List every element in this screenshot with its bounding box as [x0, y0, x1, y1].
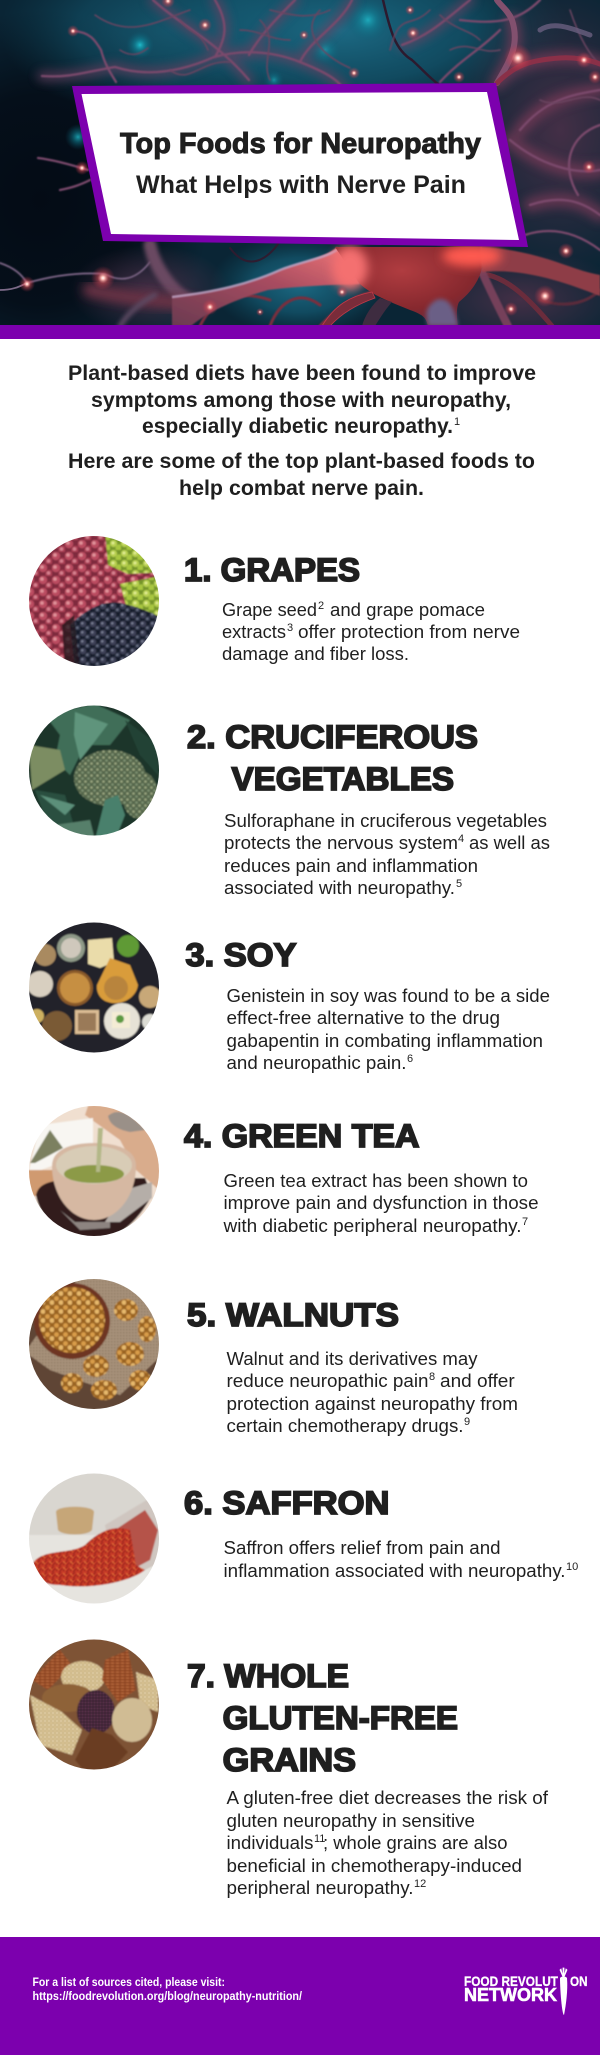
hero: axon and soma: [172, 245, 600, 326]
body: walnuts: protection against neuropathy from: [226, 1394, 518, 1414]
body: soy: gabapentin in combating inflammation: [226, 1031, 543, 1051]
body: soy: and neuropathic pain.: [226, 1053, 406, 1073]
title: Top Foods for Neuropathy: [120, 128, 481, 160]
body: grains: [226, 1788, 549, 1898]
hero: purple strip: [0, 325, 600, 339]
photo: walnuts: [29, 1279, 159, 1409]
body: grapes: damage and fiber loss.: [222, 644, 409, 664]
body: walnuts: 8: [429, 1371, 435, 1383]
hero: neuron image background: [0, 0, 600, 325]
hero: dendrite branches: [38, 0, 600, 250]
item 6: saffron: [25, 1469, 578, 1609]
body: walnuts: certain chemotherapy drugs.: [226, 1416, 464, 1436]
hero: glowing nodes: [19, 0, 600, 316]
body: walnuts: 9: [464, 1416, 470, 1428]
sources note: [32, 1977, 303, 2003]
intro text: [68, 362, 536, 500]
body: saffron: [224, 1538, 578, 1581]
item 7: whole gluten-free grains: [25, 1635, 549, 1898]
heading: green tea: 4. GREEN TEA: [184, 1118, 420, 1154]
body: green tea: improve pain and dysfunction in those: [224, 1193, 538, 1213]
body: green tea: 7: [522, 1216, 528, 1228]
item 1: grapes: [25, 530, 520, 670]
logo: Food Revolution Network: ON: [570, 1973, 588, 1989]
body: cruciferous: reduces pain and inflammation: [224, 856, 478, 876]
photo: green tea cup: [29, 1106, 159, 1236]
item 2: cruciferous vegetables: [25, 700, 550, 898]
heading: cruciferous vegetables: 2. CRUCIFEROUS: [187, 719, 478, 755]
intro text: Plant-based diets have been found to improve: [68, 362, 536, 385]
body: soy: effect-free alternative to the drug: [226, 1008, 500, 1028]
photo: broccoli: [29, 706, 159, 836]
body: grains: 12: [414, 1878, 426, 1890]
body: grapes: 3: [287, 622, 293, 634]
body: soy: [226, 986, 550, 1073]
body: grains: peripheral neuropathy.: [226, 1878, 414, 1898]
title panel: [72, 83, 528, 247]
body: walnuts: and offer: [440, 1371, 515, 1391]
body: grains: ; whole grains are also: [323, 1833, 508, 1853]
subtitle: What Helps with Nerve Pain: [136, 171, 466, 199]
heading: whole gluten-free grains: 7. WHOLE: [187, 1658, 349, 1694]
logo: Food Revolution Network: [464, 1968, 588, 2015]
hero: teal glows: [65, 0, 390, 150]
icon: carrot: [560, 1968, 567, 2015]
photo: saffron: [29, 1474, 159, 1604]
body: grains: gluten neuropathy in sensitive: [226, 1811, 475, 1831]
heading: cruciferous vegetables: [187, 719, 478, 797]
heading: whole gluten-free grains: GLUTEN-FREE: [223, 1700, 458, 1736]
body: grapes: and grape pomace: [330, 600, 485, 620]
body: cruciferous: associated with neuropathy.: [224, 878, 455, 898]
body: cruciferous: Sulforaphane in cruciferous vegetables: [224, 811, 547, 831]
photo: soy foods: [29, 922, 159, 1052]
intro text: especially diabetic neuropathy.: [142, 415, 453, 438]
hero: soft branch haze: [42, 0, 600, 215]
body: cruciferous: protects the nervous system: [224, 833, 458, 853]
footer: [0, 1937, 600, 2055]
heading: soy: 3. SOY: [186, 937, 296, 973]
intro text: symptoms among those with neuropathy,: [91, 389, 511, 412]
intro text: help combat nerve pain.: [179, 477, 424, 500]
heading: walnuts: 5. WALNUTS: [187, 1297, 399, 1333]
intro text: Here are some of the top plant-based foods to: [68, 450, 535, 473]
heading: cruciferous vegetables: VEGETABLES: [232, 761, 454, 797]
body: green tea: [222, 1171, 538, 1236]
body: saffron: inflammation associated with neuropathy.: [224, 1561, 566, 1581]
body: cruciferous: 4: [458, 833, 464, 845]
body: grains: beneficial in chemotherapy-induced: [226, 1856, 522, 1876]
heading: grapes: 1. GRAPES: [184, 552, 360, 588]
body: cruciferous: as well as: [469, 833, 550, 853]
body: grapes: [222, 600, 520, 664]
item 5: walnuts: [25, 1274, 518, 1436]
body: cruciferous: [224, 811, 550, 898]
body: cruciferous: 5: [456, 878, 462, 890]
hero: lower branches: [0, 244, 600, 326]
body: grapes: 2: [318, 600, 324, 612]
photo: grains: [29, 1640, 159, 1770]
sources note: https://foodrevolution.org/blog/neuropathy-nutrition/: [32, 1991, 303, 2003]
body: saffron: 10: [566, 1561, 578, 1573]
sources note: For a list of sources cited, please visit:: [32, 1977, 225, 1989]
body: grapes: extracts: [222, 622, 286, 642]
body: walnuts: Walnut and its derivatives may: [226, 1349, 478, 1369]
body: green tea: with diabetic peripheral neuropathy.: [222, 1216, 522, 1236]
item 3: soy: [25, 918, 550, 1073]
body: grains: A gluten-free diet decreases the risk of: [226, 1788, 549, 1808]
intro text: 1: [454, 416, 460, 428]
body: soy: 6: [407, 1053, 413, 1065]
body: green tea: Green tea extract has been shown to: [224, 1171, 528, 1191]
logo: Food Revolution Network: NETWORK: [464, 1985, 557, 2005]
photo: grapes: [29, 536, 159, 666]
body: walnuts: reduce neuropathic pain: [226, 1371, 428, 1391]
body: soy: Genistein in soy was found to be a side: [226, 986, 550, 1006]
body: grains: 11: [314, 1833, 325, 1845]
body: grapes: Grape seed: [222, 600, 317, 620]
body: grapes: offer protection from nerve: [298, 622, 520, 642]
item 4: green tea: [25, 1100, 538, 1242]
heading: whole gluten-free grains: GRAINS: [223, 1742, 356, 1778]
body: saffron: Saffron offers relief from pain and: [224, 1538, 500, 1558]
body: grains: individuals: [226, 1833, 314, 1853]
body: walnuts: [226, 1349, 518, 1436]
logo: Food Revolution Network: FOOD REVOLUT: [464, 1973, 558, 1989]
heading: saffron: 6. SAFFRON: [184, 1485, 390, 1521]
heading: whole gluten-free grains: [187, 1658, 458, 1778]
